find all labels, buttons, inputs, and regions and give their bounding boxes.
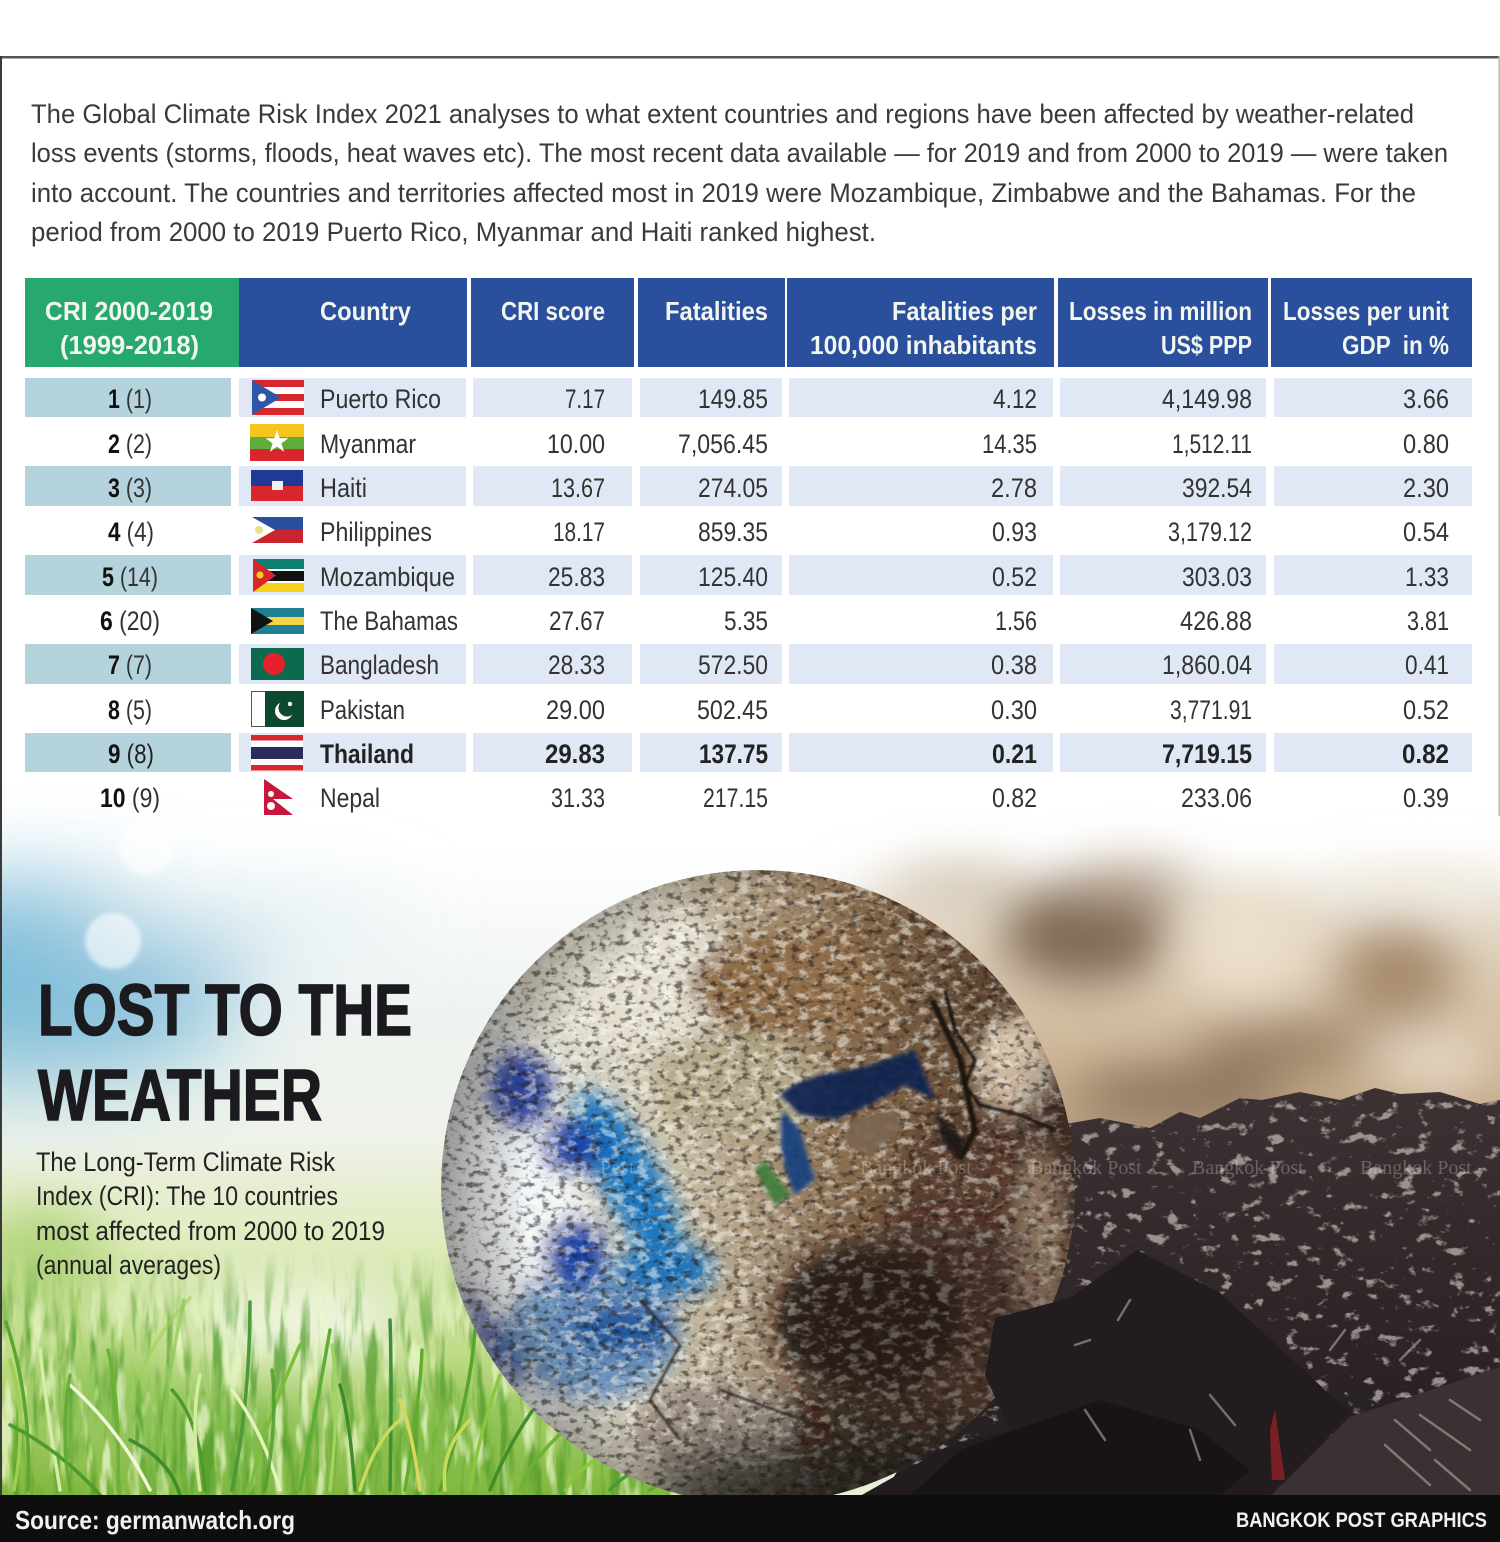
row: Myanmar: 2 (2) bbox=[108, 429, 152, 459]
row: Mozambique: 0.52 bbox=[992, 562, 1037, 592]
source credit: Source: germanwatch.org bbox=[15, 1505, 295, 1535]
globe: oceans and land bbox=[440, 900, 1065, 1480]
row: Bangladesh: 1,860.04 bbox=[1162, 650, 1252, 680]
row: Haiti bbox=[108, 470, 1449, 503]
globe: surface cracks bbox=[534, 893, 1056, 1476]
table header: Country bbox=[320, 296, 411, 326]
row: Puerto Rico: 3.66 bbox=[1403, 384, 1449, 414]
bag highlights bbox=[1075, 1300, 1480, 1490]
row: Puerto Rico: Puerto Rico bbox=[320, 384, 441, 414]
row: The Bahamas bbox=[100, 606, 1449, 636]
icon: flag of The Bahamas bbox=[251, 608, 304, 634]
row: Myanmar: 7,056.45 bbox=[678, 429, 768, 459]
row: Myanmar bbox=[108, 424, 1449, 461]
row: Nepal: 10 (9) bbox=[100, 783, 160, 813]
row: Thailand (highlighted): 7,719.15 bbox=[1162, 739, 1252, 769]
table bbox=[25, 278, 1472, 815]
row: Bangladesh bbox=[108, 648, 1449, 680]
row: Bangladesh: 28.33 bbox=[548, 650, 605, 680]
row: The Bahamas: 27.67 bbox=[549, 606, 605, 636]
row: Bangladesh: Bangladesh bbox=[320, 650, 439, 680]
row: Thailand (highlighted): Thailand bbox=[320, 739, 414, 769]
row: Thailand (highlighted): 0.21 bbox=[992, 739, 1037, 769]
watermark: Bangkok Post bbox=[1030, 1157, 1142, 1179]
row: Nepal: 233.06 bbox=[1181, 783, 1252, 813]
row: The Bahamas: 5.35 bbox=[724, 606, 768, 636]
table header: Fatalities per bbox=[892, 296, 1037, 326]
row: The Bahamas: The Bahamas bbox=[320, 606, 458, 636]
row: Philippines: Philippines bbox=[320, 517, 432, 547]
plastic bag in front of globe bbox=[860, 1250, 1500, 1496]
row: The Bahamas: 426.88 bbox=[1180, 606, 1252, 636]
globe bbox=[440, 870, 1090, 1535]
intro paragraph: into account. The countries and territories affected most in 2019 were Mozambique, Zimbabwe and the Bahamas. For the bbox=[31, 178, 1416, 208]
row: Pakistan: 0.52 bbox=[1403, 695, 1449, 725]
table header: (1999-2018) bbox=[60, 330, 199, 360]
row: Puerto Rico bbox=[108, 380, 1449, 415]
table header: CRI 2000-2019 bbox=[45, 296, 213, 326]
row: Myanmar: 14.35 bbox=[982, 429, 1037, 459]
row: The Bahamas: 3.81 bbox=[1407, 606, 1449, 636]
row: Philippines bbox=[108, 517, 1449, 547]
icon: flag of Thailand bbox=[251, 735, 303, 771]
grass field bbox=[2, 1154, 682, 1495]
subtitle: most affected from 2000 to 2019 bbox=[36, 1216, 385, 1246]
row: Puerto Rico: 7.17 bbox=[565, 384, 605, 414]
table header: CRI score bbox=[501, 296, 605, 326]
row: Mozambique: 125.40 bbox=[698, 562, 768, 592]
table header: 100,000 inhabitants bbox=[810, 330, 1037, 360]
intro paragraph: loss events (storms, floods, heat waves etc). The most recent data available — for 2019 and from 2000 to 2019 — were taken bbox=[31, 138, 1448, 168]
row: Bangladesh: 0.38 bbox=[991, 650, 1037, 680]
bokeh light spots bbox=[83, 850, 163, 971]
icon: flag of Pakistan bbox=[252, 691, 304, 727]
table header: Fatalities bbox=[665, 296, 768, 326]
footer bar bbox=[0, 1495, 1500, 1542]
row: Haiti: 2.30 bbox=[1403, 473, 1449, 503]
row: Thailand (highlighted) bbox=[108, 735, 1449, 771]
row: Puerto Rico: 1 (1) bbox=[108, 384, 152, 414]
intro paragraph bbox=[31, 99, 1448, 247]
row: Nepal: 0.39 bbox=[1403, 783, 1449, 813]
row: Haiti: 2.78 bbox=[991, 473, 1037, 503]
row: Haiti: 13.67 bbox=[551, 473, 605, 503]
row: Nepal: 0.82 bbox=[992, 783, 1037, 813]
sky: blue glow at left bbox=[0, 880, 410, 1080]
row: Myanmar: 1,512.11 bbox=[1172, 429, 1252, 459]
row: Philippines: 18.17 bbox=[553, 517, 605, 547]
row: Mozambique: Mozambique bbox=[320, 562, 455, 592]
row: Philippines: 0.54 bbox=[1403, 517, 1449, 547]
plastic waste pile bbox=[880, 1088, 1500, 1500]
table header: Losses per unit bbox=[1283, 296, 1449, 326]
subtitle: The Long-Term Climate Risk bbox=[36, 1147, 335, 1177]
row: Haiti: 392.54 bbox=[1182, 473, 1252, 503]
row: Haiti: 274.05 bbox=[698, 473, 768, 503]
row: Myanmar: 0.80 bbox=[1403, 429, 1449, 459]
row: Puerto Rico: 149.85 bbox=[698, 384, 768, 414]
row: Pakistan: 502.45 bbox=[697, 695, 768, 725]
row: Haiti: 3 (3) bbox=[108, 473, 152, 503]
row: Mozambique: 25.83 bbox=[548, 562, 605, 592]
watermark: Post bbox=[600, 1157, 635, 1179]
row: Thailand (highlighted): 9 (8) bbox=[108, 739, 154, 769]
globe: dark lakes bbox=[755, 1050, 965, 1205]
table header: Losses in million bbox=[1069, 296, 1252, 326]
icon: flag of Puerto Rico bbox=[252, 380, 304, 415]
row: Pakistan bbox=[108, 691, 1449, 727]
zebra row bands bbox=[25, 378, 1472, 772]
subtitle: Index (CRI): The 10 countries bbox=[36, 1181, 338, 1211]
title: LOST TO THE bbox=[38, 971, 412, 1051]
icon: flag of Bangladesh bbox=[251, 648, 304, 680]
watermark: Bangkok Post bbox=[1360, 1157, 1472, 1179]
row: Haiti: Haiti bbox=[320, 473, 367, 503]
row: Bangladesh: 0.41 bbox=[1405, 650, 1449, 680]
watermark: Bangkok Post bbox=[860, 1157, 972, 1179]
subtitle bbox=[36, 1147, 385, 1280]
row: Thailand (highlighted): 137.75 bbox=[699, 739, 768, 769]
icon: flag of Haiti bbox=[251, 470, 303, 501]
row: Philippines: 0.93 bbox=[992, 517, 1037, 547]
icon: flag of Mozambique bbox=[253, 559, 304, 592]
row: Bangladesh: 572.50 bbox=[698, 650, 768, 680]
row: Bangladesh: 7 (7) bbox=[108, 650, 152, 680]
title bbox=[38, 971, 412, 1136]
intro paragraph: period from 2000 to 2019 Puerto Rico, Myanmar and Haiti ranked highest. bbox=[31, 217, 876, 247]
icon: flag of Myanmar bbox=[250, 424, 304, 461]
row: Thailand (highlighted): 0.82 bbox=[1402, 739, 1449, 769]
watermark: Bangkok Post bbox=[1192, 1157, 1304, 1179]
title: WEATHER bbox=[38, 1056, 322, 1136]
table header: GDP in % bbox=[1342, 330, 1449, 360]
icon: flag of Philippines bbox=[252, 517, 303, 543]
row: Puerto Rico: 4,149.98 bbox=[1162, 384, 1252, 414]
row: Philippines: 3,179.12 bbox=[1168, 517, 1252, 547]
row: Mozambique: 303.03 bbox=[1182, 562, 1252, 592]
intro paragraph: The Global Climate Risk Index 2021 analyses to what extent countries and regions have been affected by weather-related bbox=[31, 99, 1414, 129]
row: Puerto Rico: 4.12 bbox=[993, 384, 1037, 414]
row: Mozambique: 1.33 bbox=[1405, 562, 1449, 592]
grass blades bbox=[6, 1290, 700, 1495]
photo: earth between green grass and plastic waste bbox=[0, 800, 1500, 1535]
row: Pakistan: 3,771.91 bbox=[1170, 695, 1252, 725]
row: Nepal: 31.33 bbox=[551, 783, 605, 813]
row: Nepal bbox=[100, 779, 1449, 815]
row: Myanmar: Myanmar bbox=[320, 429, 416, 459]
row: Thailand (highlighted): 29.83 bbox=[545, 739, 605, 769]
row: Philippines: 859.35 bbox=[698, 517, 768, 547]
row: Nepal: 217.15 bbox=[703, 783, 768, 813]
row: Mozambique bbox=[102, 559, 1449, 592]
globe: shaded lower right bbox=[650, 1050, 1090, 1535]
table header bbox=[25, 278, 1472, 367]
row: Mozambique: 5 (14) bbox=[102, 562, 158, 592]
table header: US$ PPP bbox=[1161, 330, 1252, 360]
row: Pakistan: 29.00 bbox=[546, 695, 605, 725]
row: Pakistan: Pakistan bbox=[320, 695, 405, 725]
icon: flag of Nepal bbox=[264, 779, 293, 815]
row: Pakistan: 0.30 bbox=[991, 695, 1037, 725]
row: Nepal: Nepal bbox=[320, 783, 380, 813]
row: Philippines: 4 (4) bbox=[108, 517, 154, 547]
watermark bbox=[600, 1157, 1472, 1179]
subtitle: (annual averages) bbox=[36, 1250, 221, 1280]
row: Myanmar: 10.00 bbox=[547, 429, 605, 459]
row: Pakistan: 8 (5) bbox=[108, 695, 152, 725]
row: The Bahamas: 6 (20) bbox=[100, 606, 160, 636]
row: The Bahamas: 1.56 bbox=[995, 606, 1037, 636]
sky: brown clouds at right bbox=[850, 865, 1500, 1200]
